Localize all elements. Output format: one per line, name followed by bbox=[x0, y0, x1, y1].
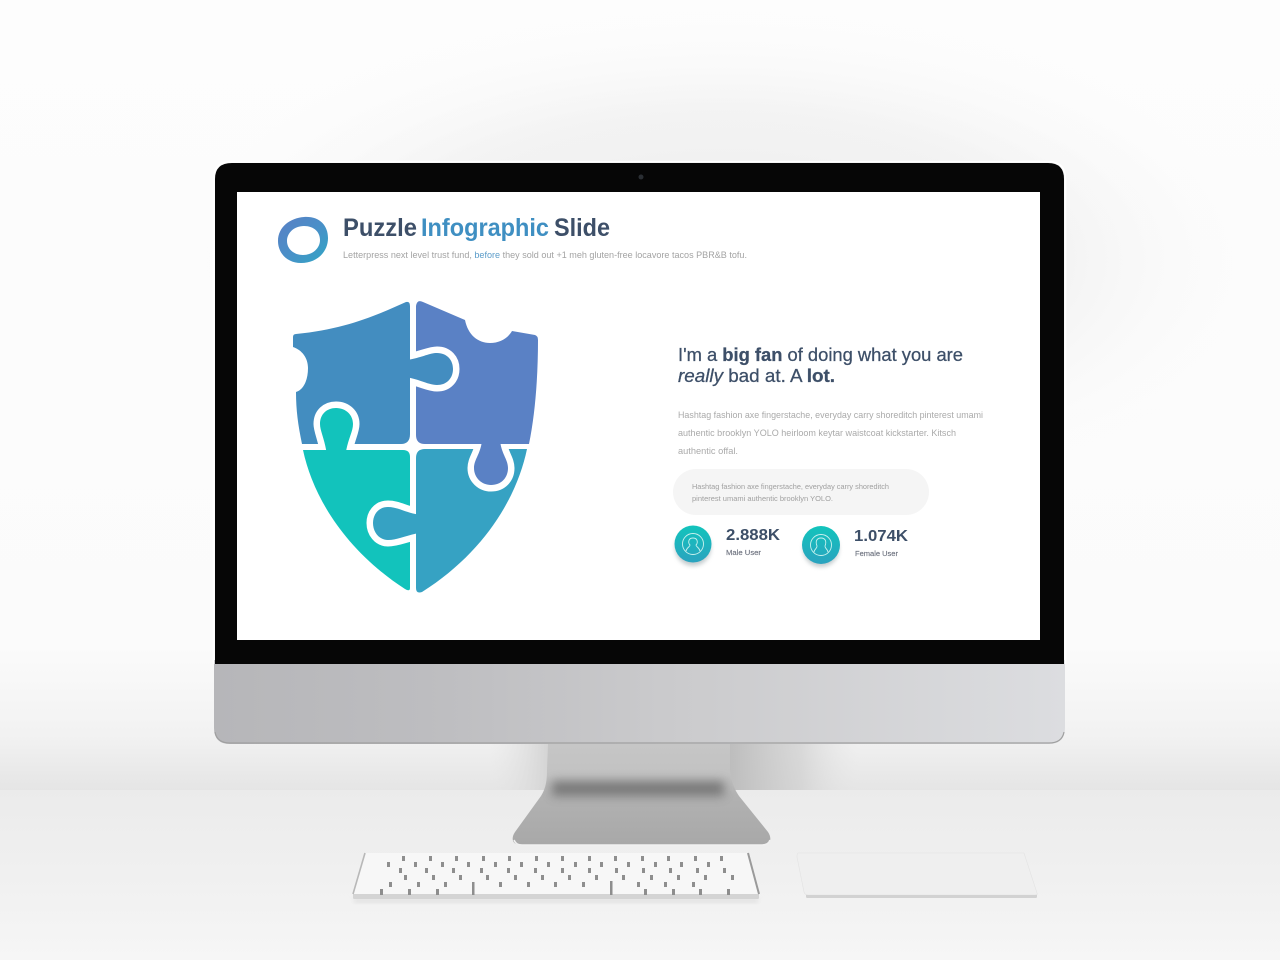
headline bbox=[678, 345, 963, 386]
monitor stand bbox=[513, 744, 770, 845]
title bbox=[343, 214, 610, 242]
screen bbox=[237, 192, 1040, 640]
piece: top left bbox=[293, 302, 410, 444]
stat: male user: Male User bbox=[726, 548, 762, 557]
wall shadow left of stand bbox=[490, 744, 548, 790]
stat: female user: Female User bbox=[855, 549, 898, 558]
tab: bottom left into top left bbox=[320, 408, 353, 460]
bezel highlight edge bbox=[214, 162, 1066, 664]
trackpad bbox=[797, 853, 1037, 898]
logo ring bbox=[278, 217, 328, 263]
stat: male user: 2.888K bbox=[726, 527, 780, 544]
monitor chin bbox=[214, 660, 1065, 744]
body paragraph bbox=[678, 410, 983, 457]
tab: top left into top right bbox=[400, 353, 453, 385]
desk surface bbox=[0, 790, 1280, 960]
tab: top right into bottom right bbox=[474, 434, 508, 485]
body paragraph: authentic brooklyn YOLO heirloom keytar waistcoat kickstarter. Kitsch bbox=[678, 428, 956, 439]
piece: bottom right bbox=[416, 449, 527, 592]
stat: female user: 1.074K bbox=[854, 528, 908, 545]
stat: male user bbox=[674, 526, 780, 566]
body paragraph: authentic offal. bbox=[678, 446, 738, 457]
callout pill bbox=[673, 469, 929, 515]
title: Slide bbox=[554, 214, 610, 242]
body paragraph: Hashtag fashion axe fingerstache, everyday carry shoreditch pinterest umami bbox=[678, 410, 983, 421]
wall glow behind monitor bbox=[160, 10, 1280, 510]
headline: really bad at. A lot. bbox=[678, 366, 835, 386]
monitor bezel bbox=[215, 163, 1064, 664]
callout pill: pinterest umami authentic brooklyn YOLO. bbox=[692, 494, 833, 503]
title: Puzzle bbox=[343, 214, 417, 242]
chin lower edge bbox=[215, 732, 1064, 743]
callout pill: Hashtag fashion axe fingerstache, everyday carry shoreditch bbox=[692, 482, 889, 491]
tab: bottom right into bottom left bbox=[373, 507, 426, 540]
piece: top right bbox=[416, 301, 538, 444]
puzzle shield infographic bbox=[293, 301, 538, 592]
subtitle: Letterpress next level trust fund, before they sold out +1 meh gluten-free locavore tacos PBR&B tofu. bbox=[343, 250, 747, 261]
title: Infographic bbox=[421, 214, 549, 242]
keyboard bbox=[353, 853, 759, 903]
wall shadow right of stand bbox=[730, 744, 860, 790]
headline: I'm a big fan of doing what you are bbox=[678, 345, 963, 365]
stat: female user bbox=[802, 526, 908, 567]
webcam bbox=[638, 174, 644, 180]
piece: bottom left bbox=[303, 450, 410, 590]
